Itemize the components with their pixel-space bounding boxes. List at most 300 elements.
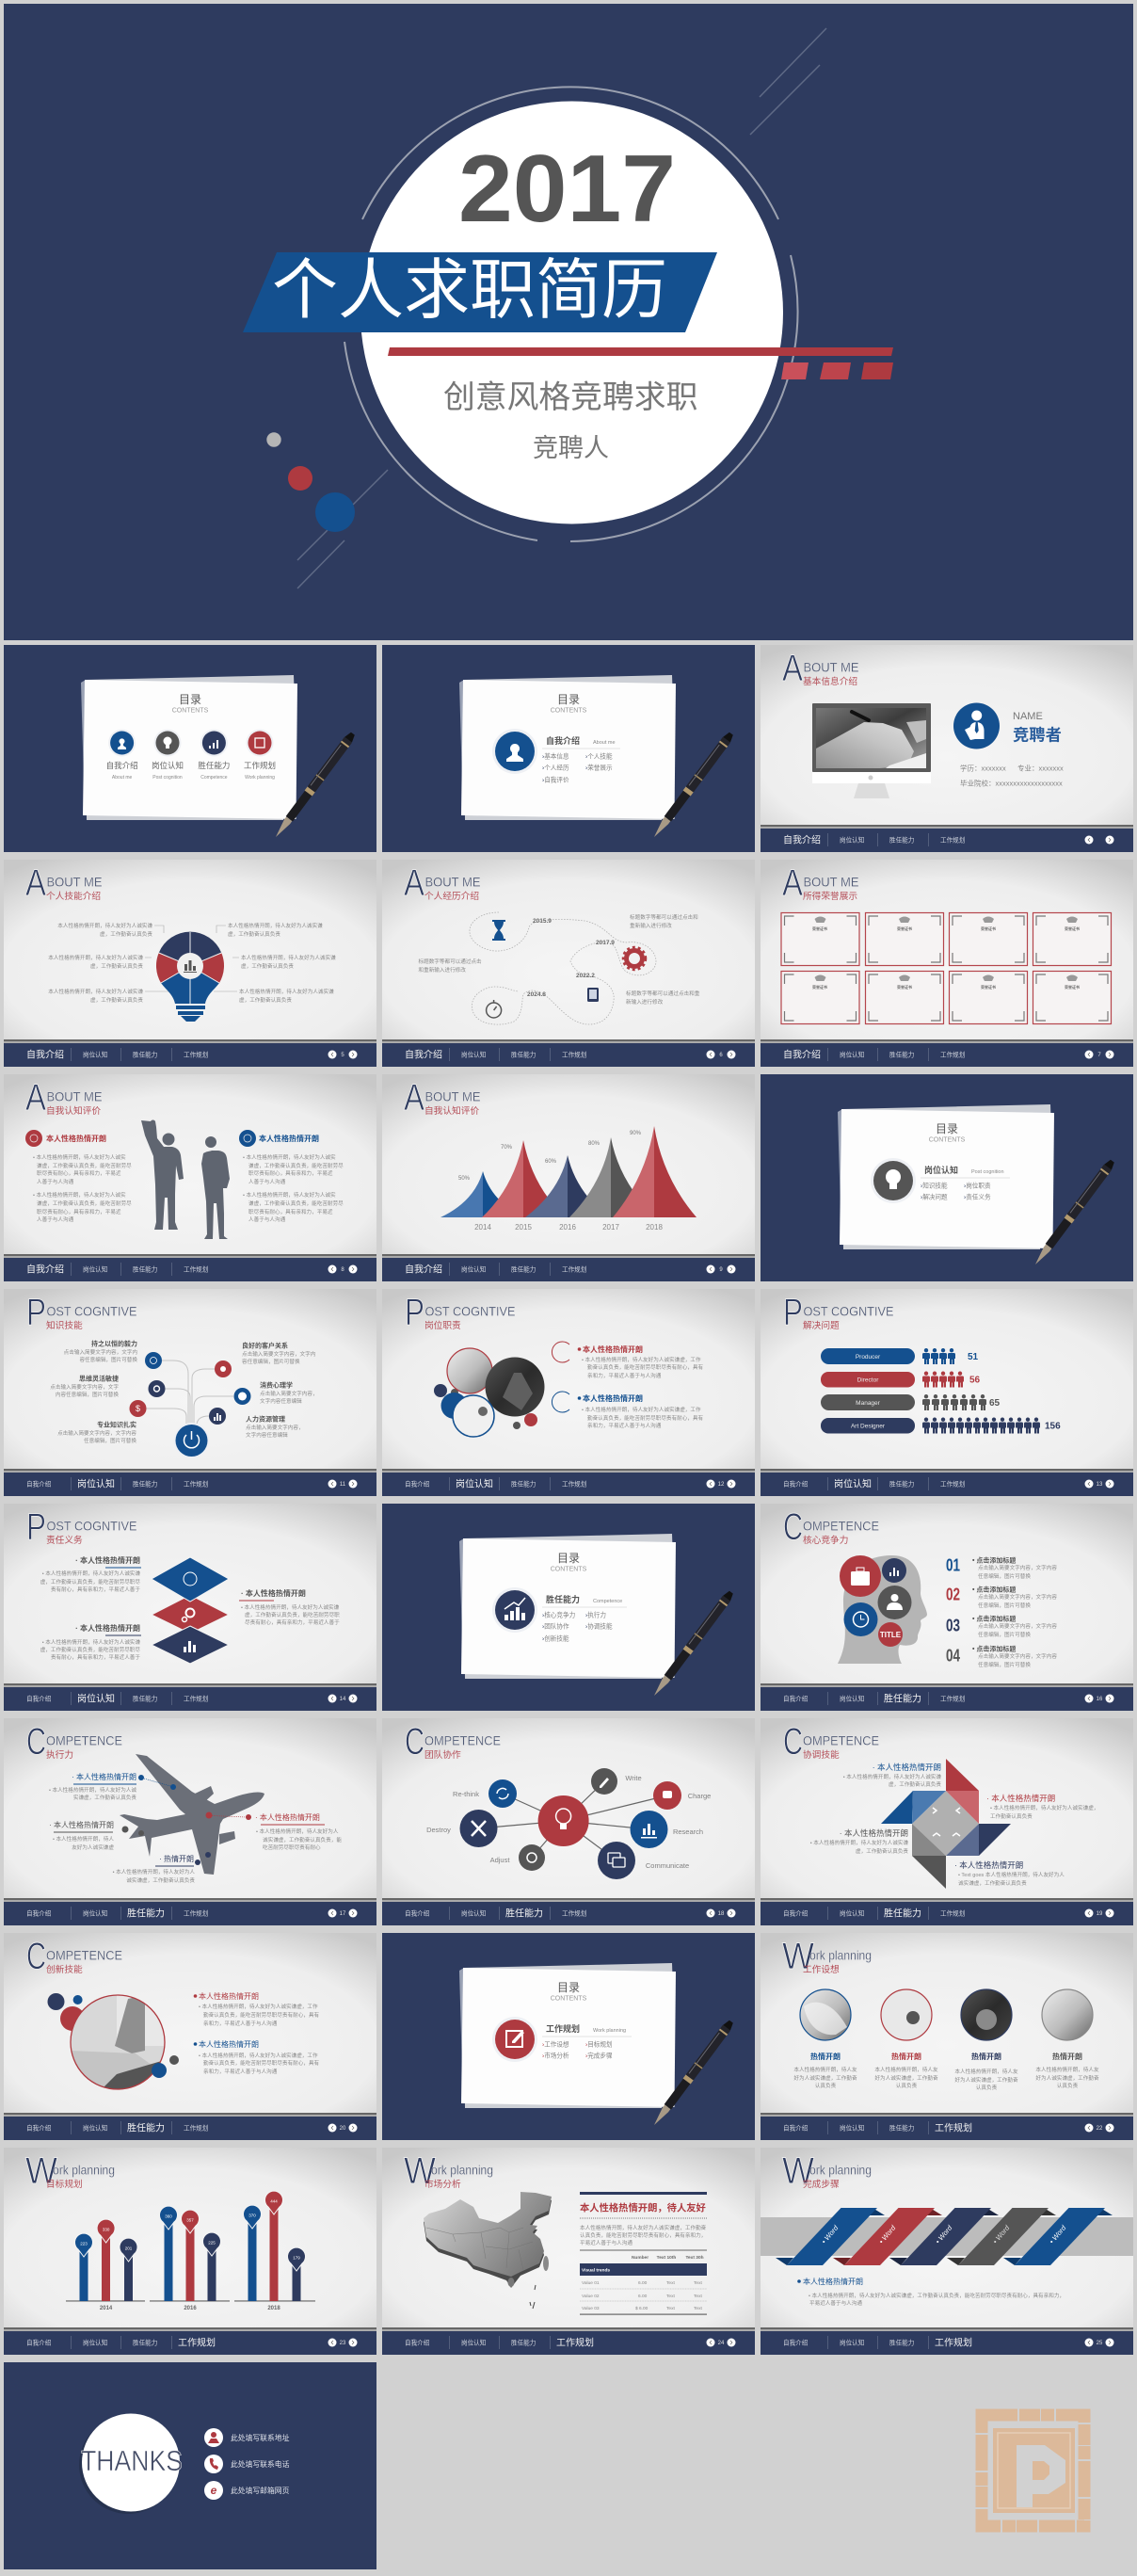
contact address	[204, 2428, 290, 2447]
section text: ›目标规划	[585, 2039, 613, 2049]
hub center	[538, 1795, 589, 1846]
name text: NAME	[1013, 711, 1043, 722]
slide 9: peak chart	[382, 1074, 755, 1281]
value pins: 357	[186, 2218, 194, 2222]
footer nav: 工作规划	[184, 1265, 209, 1273]
hub labels: Research	[673, 1827, 703, 1836]
red column: • 本人性格热情开朗，待人友好为人诚实	[33, 1153, 126, 1161]
footer nav: 24	[718, 2341, 725, 2346]
peak chart: 70%	[501, 1145, 513, 1151]
four section icons	[106, 729, 276, 781]
item two: • 本人性格热情开朗，待人友好为人诚实谦虚，工作	[199, 2052, 318, 2059]
footer nav: 工作规划	[562, 1265, 587, 1273]
heading: 目录	[557, 693, 580, 706]
footer nav: 岗位认知	[456, 1478, 493, 1489]
slide title	[783, 1506, 879, 1548]
heading	[551, 1552, 587, 1572]
footer nav: 自我介绍	[405, 1049, 442, 1060]
certificate grid: 荣誉证书	[812, 984, 827, 990]
footer nav: 自我介绍	[405, 1264, 442, 1275]
years	[100, 2306, 280, 2311]
people row gray: 65	[989, 1398, 1001, 1409]
section text: ›创新技能	[542, 1634, 569, 1642]
footer nav: 工作规划	[556, 2337, 594, 2348]
slide 5: skills bulb	[4, 860, 376, 1067]
slide title: 知识技能	[46, 1319, 83, 1331]
slide 15: section 胜任能力 contents	[382, 1504, 755, 1711]
slide 26: thanks	[4, 2362, 376, 2569]
slide 3: section 自我介绍 contents	[382, 645, 755, 852]
data table: Text	[666, 2280, 675, 2286]
callout gray: 友好为人诚实谦虚	[72, 1843, 114, 1851]
right labels: 良好的客户关系	[242, 1341, 288, 1350]
subtitle: 创意风格竞聘求职	[443, 379, 697, 415]
slide 23: target pin bars	[4, 2148, 376, 2355]
section text: ›核心竞争力	[542, 1610, 575, 1619]
peak chart: 2015	[515, 1223, 532, 1232]
slide title: OST COGNTIVE	[47, 1518, 137, 1533]
footer nav: 胜任能力	[889, 2124, 914, 2132]
blue column: 人善于与人沟通	[248, 1216, 286, 1223]
list text: 点击输入简要文字内容，文字内容	[978, 1564, 1057, 1571]
slide title: OST COGNTIVE	[47, 1303, 137, 1318]
item two: 亲和力，平易近人善于与人沟通	[587, 1422, 662, 1429]
title ribbon: 个人求职简历	[272, 253, 667, 327]
section text: ›基本信息	[542, 751, 569, 761]
slide title: OMPETENCE	[46, 1947, 122, 1962]
slide 4: basic info	[761, 645, 1133, 852]
heading	[551, 1981, 587, 2002]
heading: 目录	[557, 1552, 580, 1565]
left labels: 点击输入简要文字内容，文字内	[64, 1348, 137, 1356]
slide 22: work ideas	[761, 1933, 1133, 2140]
footer nav: 岗位认知	[840, 2124, 864, 2132]
four section icons: 自我介绍	[106, 761, 138, 770]
airplane	[120, 1754, 264, 1875]
footer nav: 工作规划	[940, 1695, 966, 1702]
red column: 谦虚，工作勤奋认真负责，能吃苦耐劳尽	[37, 1162, 132, 1169]
hub spokes	[478, 1781, 667, 1860]
slide 24: market analysis map and table	[382, 2148, 755, 2355]
callout red: 诚实谦虚，工作勤奋认真负责，能	[263, 1836, 342, 1843]
section text: ›协调技能	[585, 1621, 613, 1631]
slide title: 所得荣誉展示	[803, 890, 857, 902]
heading: 目录	[557, 1981, 580, 1994]
footer nav: 6	[719, 1053, 723, 1058]
contact phone: 此处填写联系电话	[231, 2459, 290, 2469]
item two: 勤奋认真负责，能吃苦耐劳尽职尽责有耐心，具有	[587, 1414, 703, 1422]
slide 20: innovation	[4, 1933, 376, 2140]
right labels: 点击输入简要文字内容，	[246, 1424, 304, 1431]
slide title	[26, 1936, 122, 1977]
red column: 职尽责有耐心，具有亲和力，平易近	[37, 1208, 121, 1216]
callout gray: • 本人性格热情开朗，待人	[53, 1835, 114, 1843]
timeline dates: 2015.9	[533, 918, 552, 925]
photo with dots	[47, 1989, 179, 2093]
slide title: ork planning	[809, 1947, 872, 1962]
section text: Competence	[593, 1599, 622, 1604]
slide title: 协调技能	[803, 1748, 840, 1761]
people row blue: 51	[968, 1352, 979, 1362]
slide 12: responsibilities	[382, 1289, 755, 1496]
contact web: e	[211, 2484, 217, 2497]
people row gray	[922, 1394, 1001, 1410]
section text: ›荣誉展示	[585, 763, 613, 772]
power icon	[173, 1423, 209, 1458]
column two: 热情开朗	[891, 2052, 921, 2061]
footer nav	[382, 1469, 755, 1496]
footer nav	[761, 825, 1133, 852]
footer nav: 胜任能力	[133, 1051, 157, 1058]
column three	[954, 2052, 1018, 2091]
footer nav: 13	[1097, 1482, 1103, 1488]
contact phone	[204, 2455, 290, 2473]
slide title	[783, 1292, 894, 1333]
timeline captions: 标题数字等都可以通过点击和重	[626, 990, 700, 997]
footer nav: 自我介绍	[783, 1049, 821, 1060]
left texts: 本人性格热情开朗，待人友好为人诚实谦	[57, 922, 152, 929]
right labels: 消费心理学	[260, 1380, 293, 1390]
slide 11: knowledge skills	[4, 1289, 376, 1496]
column three: 热情开朗	[971, 2052, 1001, 2061]
blue column: 谦虚，工作勤奋认真负责，能吃苦耐劳尽	[248, 1199, 344, 1207]
data table: Value 03	[582, 2306, 600, 2311]
diamonds	[152, 1557, 229, 1664]
slide title	[25, 2150, 115, 2192]
bars	[79, 2204, 301, 2301]
slide 17: execution airplane	[4, 1718, 376, 1925]
callout navy: • 本人性格热情开朗，待人友好为人	[113, 1868, 195, 1876]
value pins	[74, 2191, 305, 2271]
peak chart: 2016	[559, 1223, 576, 1232]
footer nav	[4, 1469, 376, 1496]
footer nav: 自我介绍	[783, 834, 821, 845]
numbered list: 04	[946, 1646, 960, 1665]
footer nav: 工作规划	[184, 1051, 209, 1058]
role pills: Director	[857, 1377, 879, 1384]
footer nav	[761, 2327, 1133, 2355]
footer nav: 工作规划	[184, 1695, 209, 1702]
item one: • 本人性格热情开朗，待人友好为人诚实谦虚，工作	[199, 2003, 318, 2010]
years: 2014	[100, 2306, 113, 2311]
text navy	[954, 1860, 1065, 1887]
footer nav: 工作规划	[940, 1480, 966, 1488]
left text bottom: • 本人性格热情开朗，待人友好为人诚实谦	[42, 1638, 140, 1646]
footer nav: 14	[340, 1697, 346, 1702]
head circles: TITLE	[880, 1631, 902, 1639]
role pills: Producer	[856, 1354, 881, 1360]
slide title	[783, 1721, 879, 1763]
caption: 平易近人善于与人沟通	[809, 2299, 862, 2307]
footer nav: 胜任能力	[505, 1908, 543, 1919]
china map	[424, 2192, 552, 2309]
item two: 亲和力，平易近人善于与人沟通	[203, 2068, 278, 2075]
callout navy: 诚实谦虚，工作勤奋认真负责	[126, 1876, 195, 1884]
text blue: 虚，工作勤奋认真负责	[889, 1780, 941, 1788]
text blue: • 本人性格热情开朗，待人友好为人诚实谦	[843, 1773, 941, 1780]
section icon	[492, 729, 537, 774]
four section icons: Competence	[200, 775, 228, 781]
footer nav: 工作规划	[562, 1480, 587, 1488]
column three: 好为人诚实谦虚，工作勤奋	[954, 2076, 1018, 2084]
slide title: OMPETENCE	[803, 1732, 879, 1747]
slide title: 执行力	[46, 1748, 73, 1761]
timeline captions: 标题数字等都可以通过点击	[418, 958, 482, 965]
column two: 认真负责	[896, 2082, 918, 2089]
right labels: 文字内容任意编辑	[246, 1431, 288, 1439]
slide title: BOUT ME	[425, 874, 480, 889]
left text bottom: 责有耐心，具有亲和力，平易近人善于	[51, 1653, 140, 1661]
head silhouette	[838, 1555, 927, 1664]
details: 毕业院校：xxxxxxxxxxxxxxxxxxx	[960, 778, 1063, 787]
slide title: W	[25, 2150, 57, 2192]
blue column: 人善于与人沟通	[248, 1178, 286, 1185]
details	[960, 763, 1064, 787]
slide title: 自我认知评价	[424, 1104, 479, 1117]
list text	[972, 1555, 1057, 1668]
hub labels: Re-think	[453, 1790, 479, 1798]
footer nav: 23	[340, 2341, 346, 2346]
footer nav: 胜任能力	[511, 1051, 536, 1058]
data table: Text	[694, 2294, 702, 2299]
section text: ›知识技能	[921, 1181, 948, 1190]
node circles	[130, 1352, 250, 1425]
numbered list: 03	[946, 1616, 960, 1634]
left labels: 持之以恒的毅力	[91, 1339, 137, 1348]
ribbon five	[1003, 2208, 1113, 2265]
footer nav	[382, 1254, 755, 1281]
slide 7: honours certificates	[761, 860, 1133, 1067]
right texts: 虚，工作勤奋认真负责	[241, 962, 294, 970]
footer nav: 自我介绍	[26, 2124, 52, 2132]
slide title: BOUT ME	[804, 659, 858, 674]
right text: • 本人性格热情开朗，待人友好为人诚实谦	[241, 1603, 340, 1611]
slide title: OMPETENCE	[803, 1518, 879, 1533]
slide title	[405, 1292, 516, 1333]
list text: 任意编辑，图片可替换	[978, 1661, 1031, 1668]
contact web	[204, 2481, 290, 2500]
slide title: P	[405, 1292, 424, 1333]
right texts: 虚，工作勤奋认真负责	[228, 930, 280, 938]
left texts: 虚，工作勤奋认真负责	[90, 962, 143, 970]
four section icons: About me	[112, 775, 133, 781]
callout navy: · 热情开朗	[159, 1854, 194, 1863]
callout blue: · 本人性格热情开朗	[72, 1772, 136, 1781]
value pins: 225	[208, 2241, 216, 2245]
slide title: P	[783, 1292, 803, 1333]
callout red: · 本人性格热情开朗	[255, 1812, 320, 1822]
footer nav: 岗位认知	[840, 1695, 864, 1702]
right text: · 本人性格热情开朗	[241, 1588, 306, 1598]
item one	[552, 1342, 703, 1379]
footer nav: 胜任能力	[889, 1480, 914, 1488]
left labels: 容任意编辑，图片可替换	[79, 1356, 137, 1363]
slide title: C	[26, 1721, 46, 1763]
slide title: C	[26, 1936, 46, 1977]
blue column: 职尽责有耐心，具有亲和力，平易近	[248, 1169, 333, 1177]
slide title: 岗位职责	[424, 1319, 461, 1331]
hero slide: cover	[4, 4, 1133, 640]
footer nav: 岗位认知	[83, 1265, 107, 1273]
footer nav: 胜任能力	[889, 2339, 914, 2346]
footer nav: 19	[1097, 1911, 1103, 1917]
right labels: 文字内容任意编辑	[260, 1397, 302, 1405]
footer nav: 胜任能力	[133, 1695, 157, 1702]
slide title	[782, 648, 858, 689]
footer nav: 岗位认知	[83, 2339, 107, 2346]
ribbon four: • Word	[991, 2223, 1012, 2246]
item two	[194, 2039, 319, 2075]
footer nav	[761, 1039, 1133, 1067]
slide title: OMPETENCE	[46, 1732, 122, 1747]
footer nav	[4, 1898, 376, 1925]
right panel paragraph	[580, 2224, 707, 2246]
footer nav: 7	[1097, 1053, 1101, 1058]
footer nav: 岗位认知	[461, 1909, 486, 1917]
footer nav	[761, 1469, 1133, 1496]
four section icons: 岗位认知	[152, 761, 184, 770]
footer nav	[4, 1254, 376, 1281]
profile icon	[953, 702, 1000, 749]
red column: 本人性格热情开朗	[46, 1134, 106, 1143]
slide title	[25, 1077, 102, 1119]
hub labels: Communicate	[646, 1861, 689, 1870]
footer nav: 自我介绍	[783, 1695, 809, 1702]
red column: 职尽责有耐心，具有亲和力，平易近	[37, 1169, 121, 1177]
contact address: 此处填写联系地址	[231, 2433, 290, 2442]
numbered list: 02	[946, 1586, 960, 1604]
footer nav: 胜任能力	[884, 1908, 921, 1919]
item two	[552, 1392, 703, 1429]
white circle	[360, 102, 783, 523]
slide title: 核心竞争力	[803, 1534, 848, 1546]
text blue	[843, 1763, 941, 1788]
list text: 点击输入简要文字内容，文字内容	[978, 1593, 1057, 1601]
text navy: 诚实谦虚，工作勤奋认真负责	[958, 1879, 1027, 1887]
footer nav: 工作规划	[562, 1051, 587, 1058]
list text: 任意编辑，图片可替换	[978, 1631, 1031, 1638]
section text: ›责任义务	[964, 1192, 991, 1201]
slide title: 责任义务	[46, 1534, 83, 1546]
right panel paragraph: 本人性格热情开朗，待人友好为人诚实谦虚，工作勤奋	[580, 2224, 707, 2231]
white circle	[79, 2414, 180, 2514]
pinwheel	[881, 1759, 1011, 1889]
right texts: 虚，工作勤奋认真负责	[239, 996, 292, 1004]
data table: Value 01	[582, 2280, 600, 2286]
footer nav: 11	[340, 1482, 346, 1488]
list text: 任意编辑，图片可替换	[978, 1572, 1031, 1580]
footer nav: 岗位认知	[840, 1909, 864, 1917]
section text: ›完成步骤	[585, 2051, 613, 2060]
certificate grid: 荣誉证书	[981, 984, 996, 990]
red column: 谦虚，工作勤奋认真负责，能吃苦耐劳尽	[37, 1199, 132, 1207]
footer nav: 工作规划	[940, 1051, 966, 1058]
section icon	[492, 1587, 537, 1633]
item one	[194, 1991, 319, 2027]
ribbon one: • Word	[820, 2223, 841, 2246]
right panel heading	[580, 2192, 707, 2218]
section text: 岗位认知	[924, 1165, 958, 1175]
blue column: 谦虚，工作勤奋认真负责，能吃苦耐劳尽	[248, 1162, 344, 1169]
column three: 认真负责	[976, 2084, 998, 2091]
details: 专业：xxxxxxx	[1017, 763, 1064, 772]
list text: • 点击添加标题	[972, 1644, 1016, 1653]
slide title	[26, 1721, 122, 1763]
text red: • 本人性格热情开朗，待人友好为人诚实谦虚，	[990, 1804, 1098, 1811]
footer nav: 胜任能力	[133, 2339, 157, 2346]
callout gray	[49, 1820, 144, 1851]
footer nav: 胜任能力	[133, 1480, 157, 1488]
footer nav: 岗位认知	[77, 1693, 115, 1704]
text blue: · 本人性格热情开朗	[873, 1763, 941, 1772]
ribbon three	[889, 2208, 999, 2265]
footer nav	[382, 2327, 755, 2355]
footer nav	[382, 1898, 755, 1925]
peak chart: 2014	[474, 1223, 491, 1232]
photo bubbles	[434, 1348, 544, 1437]
slide title: 完成步骤	[803, 2178, 840, 2190]
numbered list: 01	[946, 1555, 960, 1574]
data table: Visual trends	[582, 2267, 610, 2273]
data table	[580, 2250, 707, 2315]
callout blue	[49, 1772, 176, 1801]
slide title	[782, 1936, 872, 1977]
slide title: W	[404, 2150, 436, 2192]
slide 6: experience timeline	[382, 860, 755, 1067]
heading: 目录	[936, 1122, 958, 1135]
red column: • 本人性格热情开朗，待人友好为人诚实	[33, 1191, 126, 1199]
left text bottom: 虚，工作勤奋认真负责，能吃苦耐劳尽职尽	[40, 1646, 140, 1653]
footer nav: 岗位认知	[840, 1051, 864, 1058]
slide title: C	[783, 1506, 803, 1548]
year: 2017	[458, 137, 676, 242]
section text	[542, 735, 620, 783]
footer nav: 5	[341, 1053, 344, 1058]
timeline dates: 2022.2	[576, 973, 595, 979]
footer nav	[761, 2113, 1133, 2140]
section text: ›执行力	[585, 1610, 606, 1619]
footer nav: 工作规划	[184, 1480, 209, 1488]
right text	[239, 1588, 340, 1626]
watermark stamp	[982, 2415, 1084, 2526]
column four: 本人性格热情开朗，待人友	[1035, 2066, 1099, 2073]
callout blue: • 本人性格热情开朗，待人友好为人诚	[49, 1786, 136, 1794]
slide title	[26, 1506, 137, 1548]
slide title: A	[782, 862, 803, 904]
footer nav: 自我介绍	[405, 1480, 430, 1488]
gear icon	[623, 947, 646, 970]
item two: • 本人性格热情开朗，待人友好为人诚实谦虚，工作	[582, 1406, 701, 1413]
right labels	[242, 1341, 318, 1439]
footer nav: 岗位认知	[83, 2124, 107, 2132]
timeline captions: 和重新输入进行修改	[418, 966, 466, 974]
footer nav: 自我介绍	[26, 2339, 52, 2346]
blue column: • 本人性格热情开朗，待人友好为人诚实	[243, 1191, 336, 1199]
section text: 胜任能力	[546, 1594, 580, 1604]
footer nav: 12	[718, 1482, 725, 1488]
left texts: 本人性格热情开朗，待人友好为人诚实谦	[48, 988, 143, 995]
name text	[1013, 711, 1062, 744]
column one: 认真负责	[815, 2082, 837, 2089]
footer nav	[4, 1039, 376, 1067]
footer nav: 胜任能力	[127, 1908, 165, 1919]
certificate grid: 荣誉证书	[981, 926, 996, 931]
value pins: 330	[103, 2228, 110, 2231]
people row red: 56	[969, 1375, 981, 1386]
details: 学历：xxxxxxx	[960, 763, 1006, 772]
certificate grid: 荣誉证书	[1065, 984, 1080, 990]
peak chart: 50%	[458, 1176, 471, 1182]
